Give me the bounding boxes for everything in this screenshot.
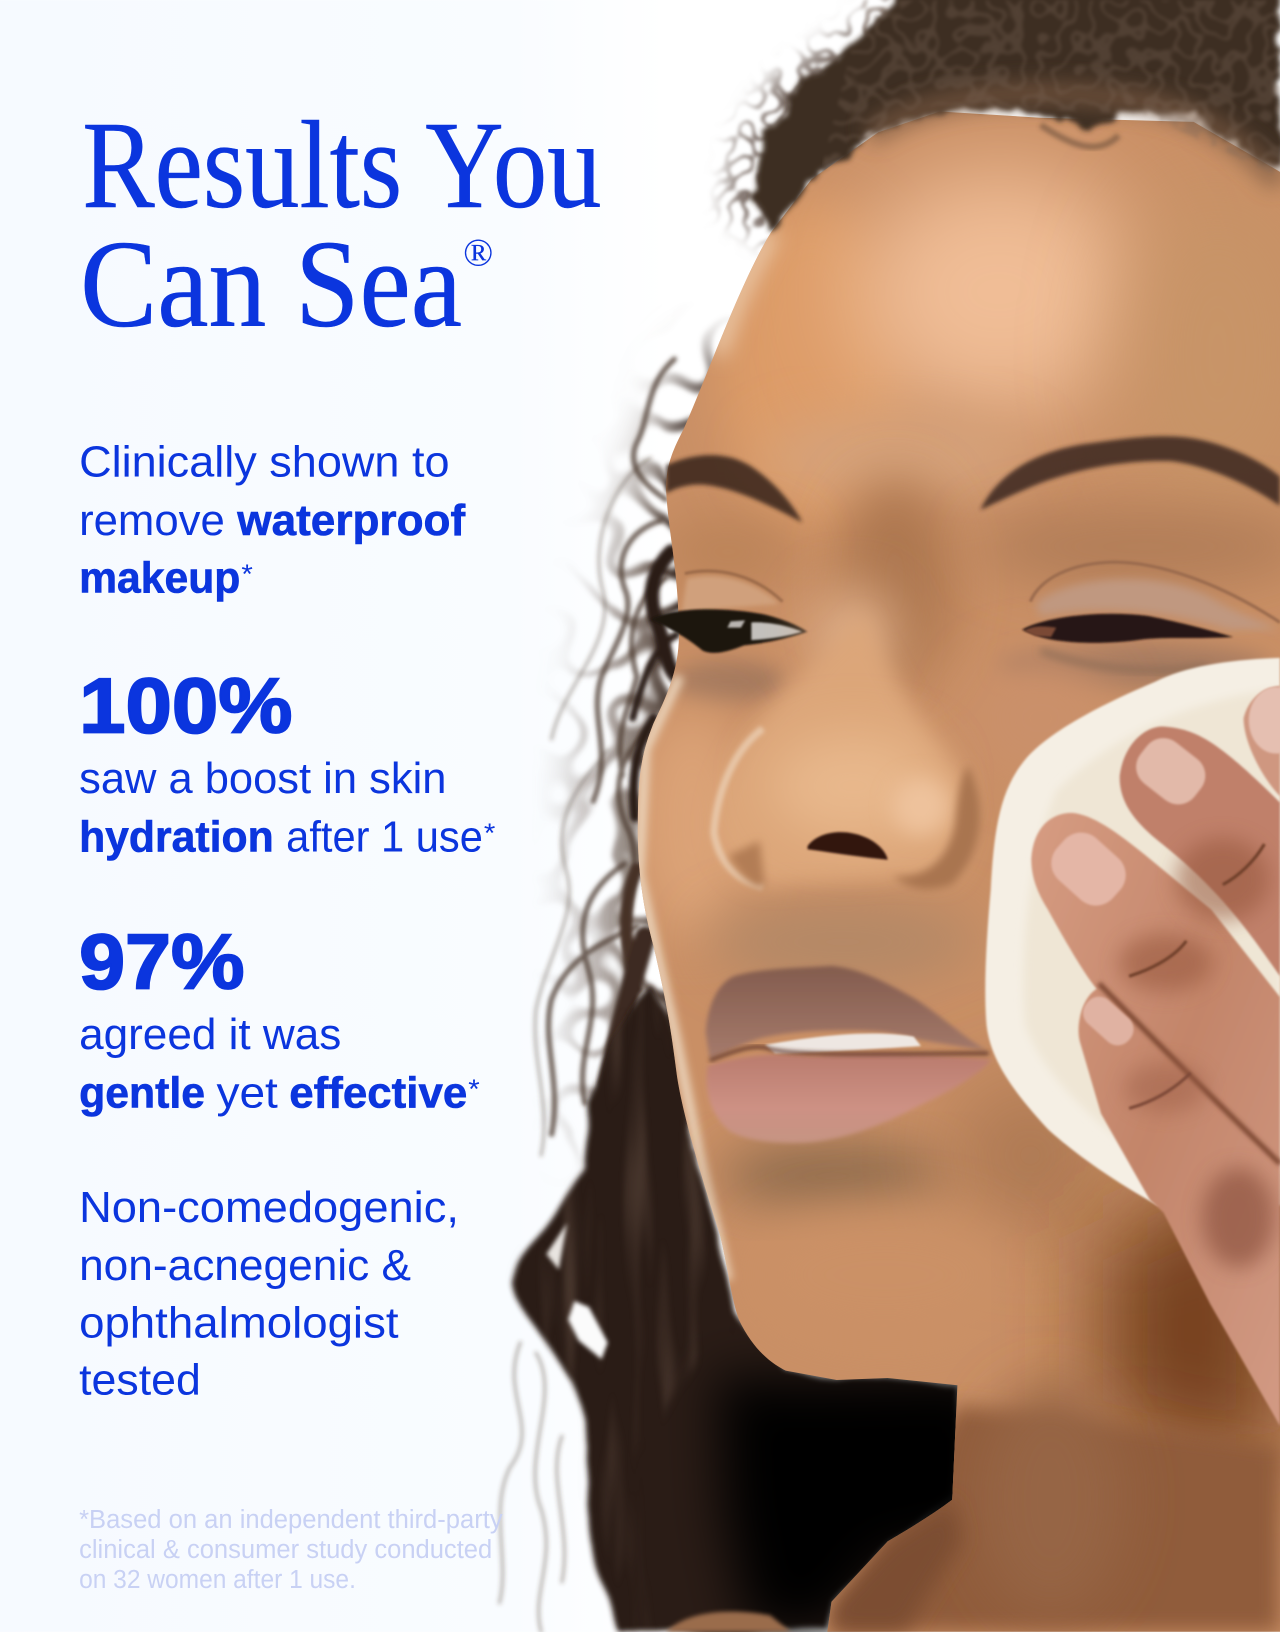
text block: waterproof makeup claim — [79, 438, 466, 602]
stat: 100% hydration: * — [484, 818, 496, 848]
forehead tones — [718, 198, 905, 531]
left eyebrow — [666, 455, 802, 523]
stat: 100% hydration: 100% — [79, 662, 292, 750]
gap in hair showing background — [568, 1301, 608, 1359]
photo: woman holding cleansing pad — [479, 0, 1280, 1632]
chin — [749, 1207, 1020, 1343]
finger shading — [1099, 984, 1280, 1164]
frizzy hair at the crown edge — [711, 0, 916, 254]
title: ® — [463, 230, 493, 274]
footnote: *Based on an independent third-party — [79, 1504, 503, 1534]
stat: 97% gentle yet effective: * — [468, 1074, 480, 1104]
loose hair wisps — [496, 318, 730, 1632]
eye socket shading — [838, 479, 952, 687]
stat: 100% hydration: after 1 use — [286, 812, 483, 861]
stat: 100% hydration — [79, 662, 496, 861]
stat: 97% gentle yet effective: effective — [289, 1068, 467, 1117]
text block: testing claims — [79, 1183, 459, 1405]
title — [80, 97, 601, 354]
text block: testing claims: tested — [79, 1356, 201, 1405]
nose — [714, 588, 980, 889]
cotton cleansing pad — [985, 658, 1280, 1205]
footnote: clinical & consumer study conducted — [79, 1534, 492, 1564]
stat: 97% gentle yet effective: gentle — [79, 1068, 205, 1117]
text block: waterproof makeup claim: Clinically shown to — [79, 438, 450, 487]
stat: 97% gentle yet effective — [79, 918, 480, 1117]
stat: 97% gentle yet effective: yet — [216, 1068, 278, 1117]
nostril — [808, 832, 888, 860]
thick dark strands beside the face — [609, 552, 676, 1082]
text block: waterproof makeup claim: remove — [79, 496, 225, 545]
text block: testing claims: ophthalmologist — [79, 1298, 399, 1347]
title: Can Sea — [80, 216, 462, 354]
right eyebrow — [980, 436, 1280, 510]
text block: testing claims: Non-comedogenic, — [79, 1183, 459, 1232]
stat: 100% hydration: saw a boost in skin — [79, 754, 446, 803]
footnote: on 32 women after 1 use. — [79, 1564, 356, 1594]
hand and fingers — [1031, 686, 1280, 1426]
right eye — [1022, 562, 1280, 670]
lips — [706, 966, 991, 1143]
stat: 97% gentle yet effective: 97% — [79, 918, 245, 1006]
stat: 97% gentle yet effective: agreed it was — [79, 1010, 341, 1059]
text block: waterproof makeup claim: makeup — [79, 553, 240, 602]
face and neck skin — [624, 94, 1280, 1632]
skin patch at bottom — [666, 1612, 791, 1632]
left eye — [650, 571, 808, 653]
text block: waterproof makeup claim: waterproof — [236, 496, 466, 545]
title: Results You — [82, 97, 601, 235]
fingernails — [1249, 687, 1280, 754]
mouth area — [708, 900, 978, 984]
footnote — [79, 1504, 503, 1594]
jaw and neck — [1103, 1155, 1280, 1478]
stat: 100% hydration: hydration — [79, 812, 274, 861]
text block: testing claims: non-acnegenic & — [79, 1241, 411, 1290]
top hair — [751, 0, 1280, 232]
text block: waterproof makeup claim: * — [241, 559, 253, 589]
long dark hair mass — [508, 982, 958, 1632]
cheeks — [638, 694, 736, 932]
